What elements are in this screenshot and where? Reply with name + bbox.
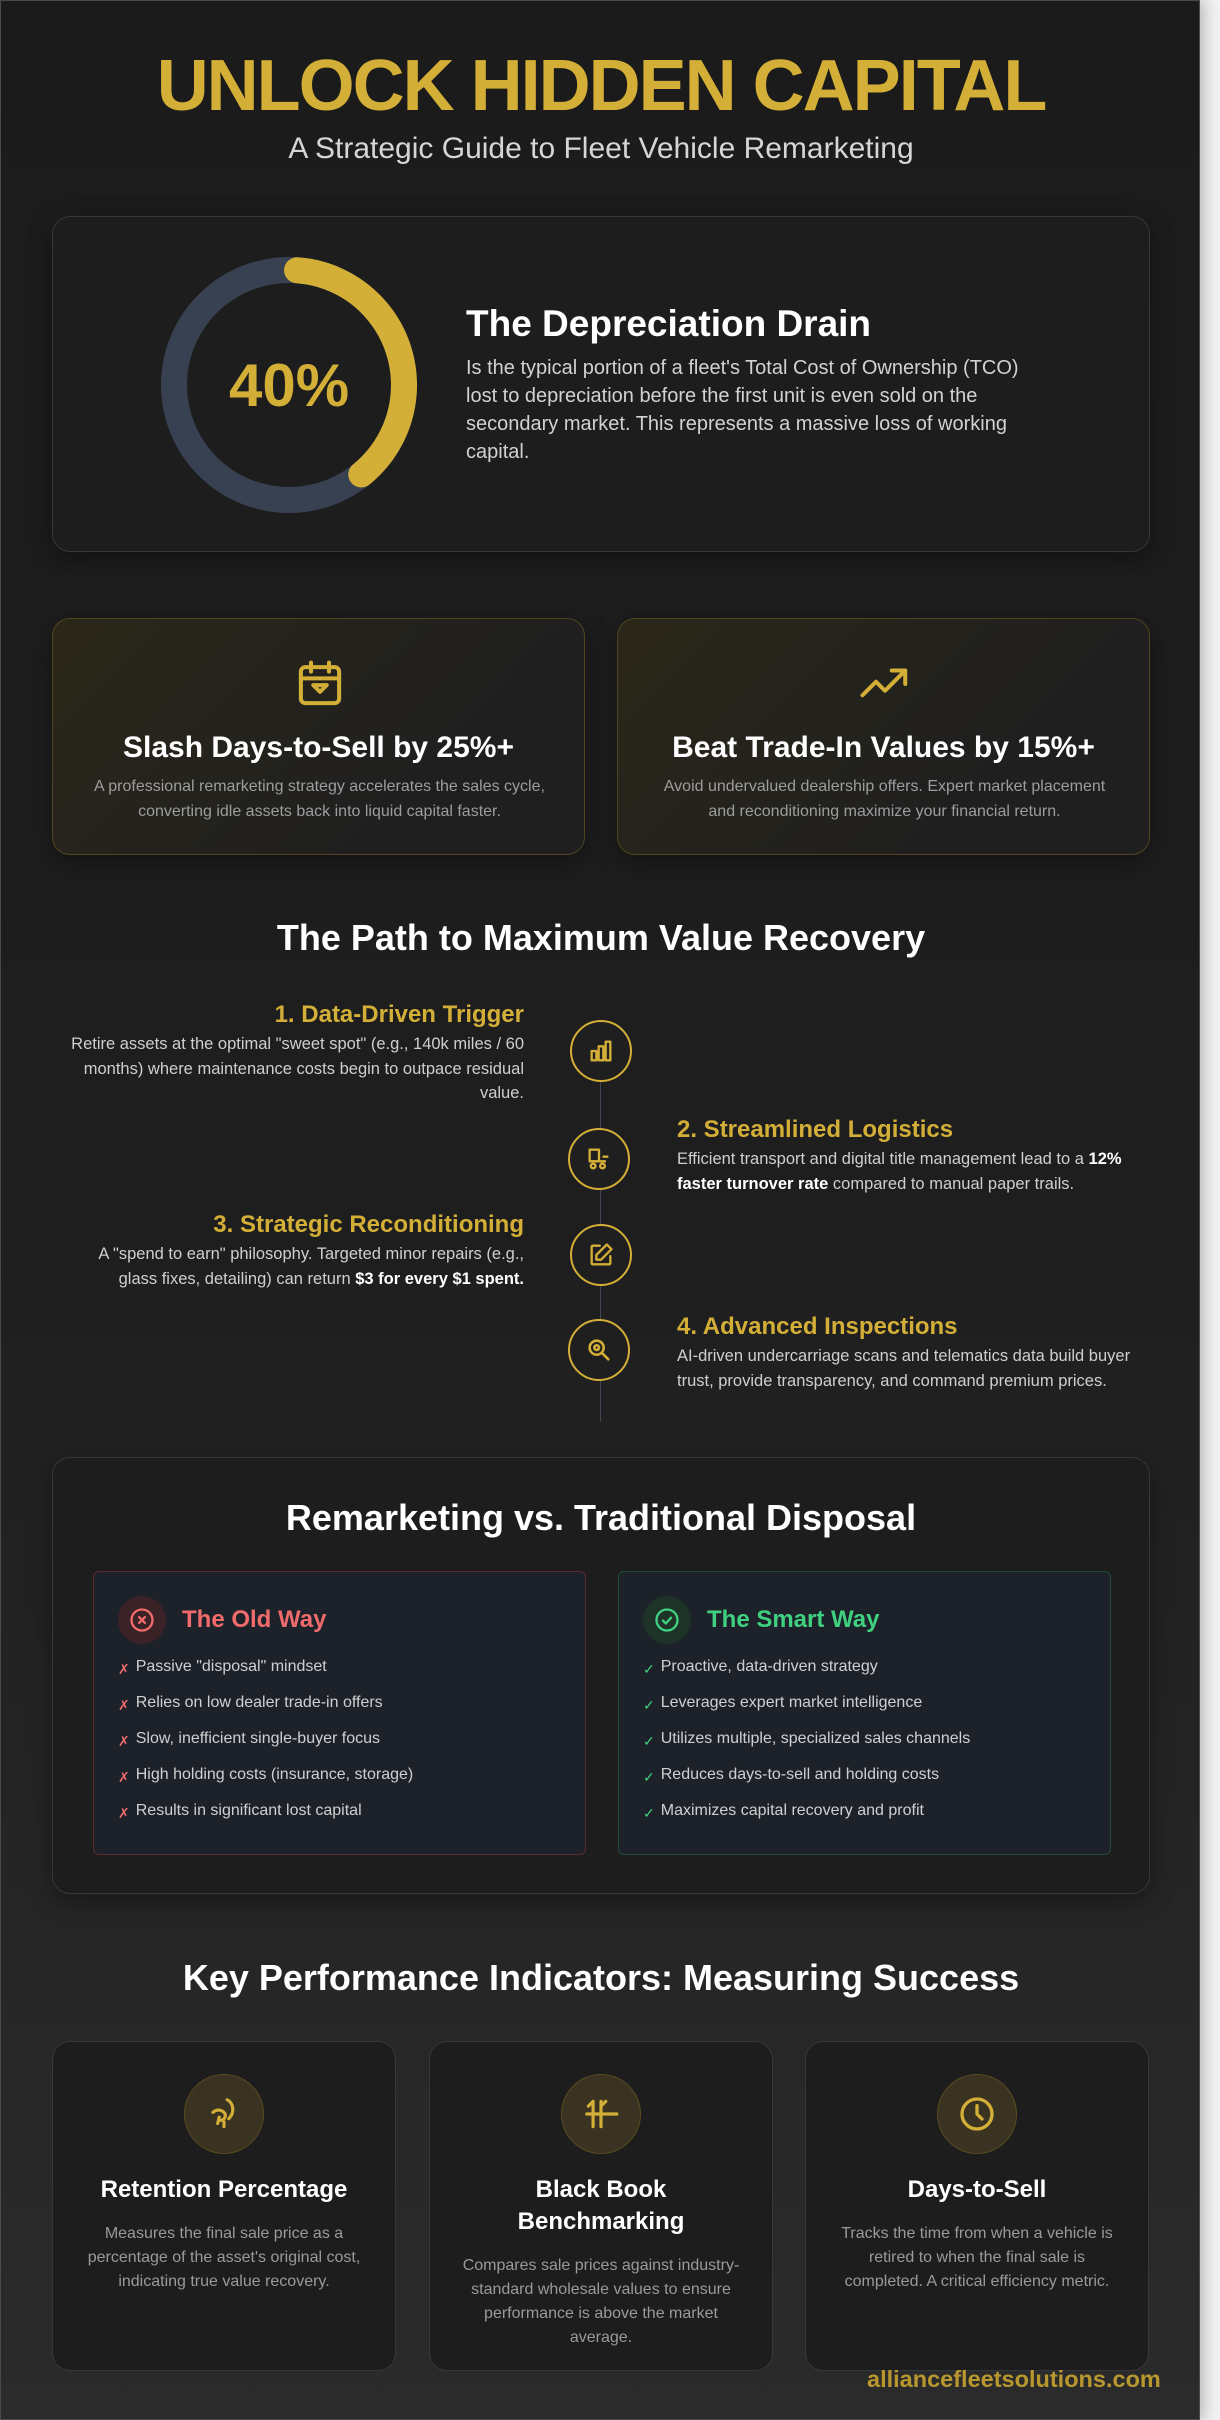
subtitle: A Strategic Guide to Fleet Vehicle Remarketing bbox=[288, 132, 914, 165]
step 1: 1. Data-Driven Trigger bbox=[275, 1001, 524, 1028]
kpi card: black book: Black Book bbox=[536, 2176, 666, 2203]
kpi card: days-to-sell: Tracks the time from when a vehicle is retired to when the final sale is completed. A critical efficiency metric. bbox=[841, 2225, 1113, 2290]
panel: depreciation drain bbox=[52, 216, 1150, 552]
step 3 bbox=[98, 1211, 632, 1288]
kpi card: black book: Compares sale prices against industry-standard wholesale values to ensure performance is above the market average. bbox=[463, 2257, 739, 2346]
icon: benchmark bbox=[561, 2074, 641, 2154]
heading: KPIs: Key Performance Indicators: Measuring Success bbox=[183, 1957, 1019, 1998]
heading: Beat Trade-In Values by 15%+ bbox=[672, 731, 1095, 764]
box: smart way: The Smart Way bbox=[707, 1606, 880, 1633]
icon: bar chart bbox=[570, 1020, 632, 1082]
kpi card: black book bbox=[429, 2041, 773, 2371]
footer url: alliancefleetsolutions.com bbox=[867, 2366, 1161, 2392]
box: smart way: ✓ Maximizes capital recovery and profit bbox=[643, 1802, 924, 1821]
kpi card: black book: Benchmarking bbox=[518, 2208, 684, 2235]
box: old way: ✗ Results in significant lost capital bbox=[118, 1802, 362, 1821]
kpi card: days-to-sell: Days-to-Sell bbox=[908, 2176, 1046, 2203]
timeline bbox=[71, 1001, 1130, 1422]
heading: Slash Days-to-Sell by 25%+ bbox=[123, 731, 514, 764]
step 1: Retire assets at the optimal "sweet spot" (e.g., 140k miles / 60 months) where maintenance costs begin to outpace residual value. bbox=[71, 1035, 524, 1102]
box: old way: ✗ Relies on low dealer trade-in offers bbox=[118, 1694, 383, 1713]
box: old way: ✗ Slow, inefficient single-buyer focus bbox=[118, 1730, 380, 1749]
step 2: 2. Streamlined Logistics bbox=[677, 1116, 953, 1143]
box: smart way: ✓ Proactive, data-driven strategy bbox=[643, 1658, 878, 1677]
step 4: AI-driven undercarriage scans and telematics data build buyer trust, provide transparency, and command premium prices. bbox=[677, 1347, 1130, 1390]
icon: check circle bbox=[643, 1596, 691, 1644]
icon: clock bbox=[937, 2074, 1017, 2154]
box: old way: ✗ High holding costs (insurance, storage) bbox=[118, 1766, 413, 1785]
box: old way: ✗ Passive "disposal" mindset bbox=[118, 1658, 327, 1677]
heading: Remarketing vs. Traditional Disposal bbox=[286, 1497, 916, 1538]
step 2: Efficient transport and digital title management lead to a 12% faster turnover rate compared to manual paper trails. bbox=[677, 1150, 1122, 1192]
kpi card: retention: Measures the final sale price as a percentage of the asset's original cost, indicating true value recovery. bbox=[88, 2225, 360, 2290]
icon: retention bbox=[184, 2074, 264, 2154]
box: old way bbox=[93, 1571, 586, 1855]
box: smart way: ✓ Utilizes multiple, specialized sales channels bbox=[643, 1730, 970, 1749]
panel: beat trade-in values bbox=[617, 618, 1150, 855]
icon: truck bbox=[568, 1128, 630, 1190]
donut chart 40%: 40% bbox=[229, 352, 349, 419]
description: Is the typical portion of a fleet's Total Cost of Ownership (TCO) lost to depreciation before the first unit is even sold on the secondary market. This represents a massive loss of working capital. bbox=[466, 357, 1019, 463]
step 2 bbox=[568, 1116, 1122, 1192]
step 3: A "spend to earn" philosophy. Targeted minor repairs (e.g., glass fixes, detailing) can return $3 for every $1 spent. bbox=[98, 1245, 524, 1288]
kpi card: retention bbox=[52, 2041, 396, 2371]
step 1 bbox=[71, 1001, 632, 1102]
kpi card: retention: Retention Percentage bbox=[101, 2176, 347, 2203]
description: A professional remarketing strategy accelerates the sales cycle, converting idle assets back into liquid capital faster. bbox=[94, 778, 545, 820]
step 4 bbox=[568, 1313, 1130, 1390]
step 3: 3. Strategic Reconditioning bbox=[213, 1211, 524, 1238]
icon: x circle bbox=[118, 1596, 166, 1644]
icon: calendar bbox=[298, 660, 342, 706]
heading: The Depreciation Drain bbox=[466, 303, 871, 344]
title: UNLOCK HIDDEN CAPITAL bbox=[157, 46, 1045, 126]
icon: trending up bbox=[860, 668, 908, 698]
description: Avoid undervalued dealership offers. Expert market placement and reconditioning maximize your financial return. bbox=[664, 778, 1105, 820]
box: smart way: ✓ Reduces days-to-sell and holding costs bbox=[643, 1766, 939, 1785]
panel: comparison bbox=[52, 1457, 1150, 1894]
icon: search bbox=[568, 1319, 630, 1381]
step 4: 4. Advanced Inspections bbox=[677, 1313, 958, 1340]
icon: pencil square bbox=[570, 1224, 632, 1286]
donut chart 40% bbox=[161, 257, 417, 513]
panel: slash days-to-sell bbox=[52, 618, 585, 855]
heading: path: The Path to Maximum Value Recovery bbox=[277, 917, 925, 958]
box: smart way bbox=[618, 1571, 1111, 1855]
box: smart way: ✓ Leverages expert market intelligence bbox=[643, 1694, 922, 1713]
box: old way: The Old Way bbox=[182, 1606, 326, 1633]
kpi card: days-to-sell bbox=[805, 2041, 1149, 2371]
